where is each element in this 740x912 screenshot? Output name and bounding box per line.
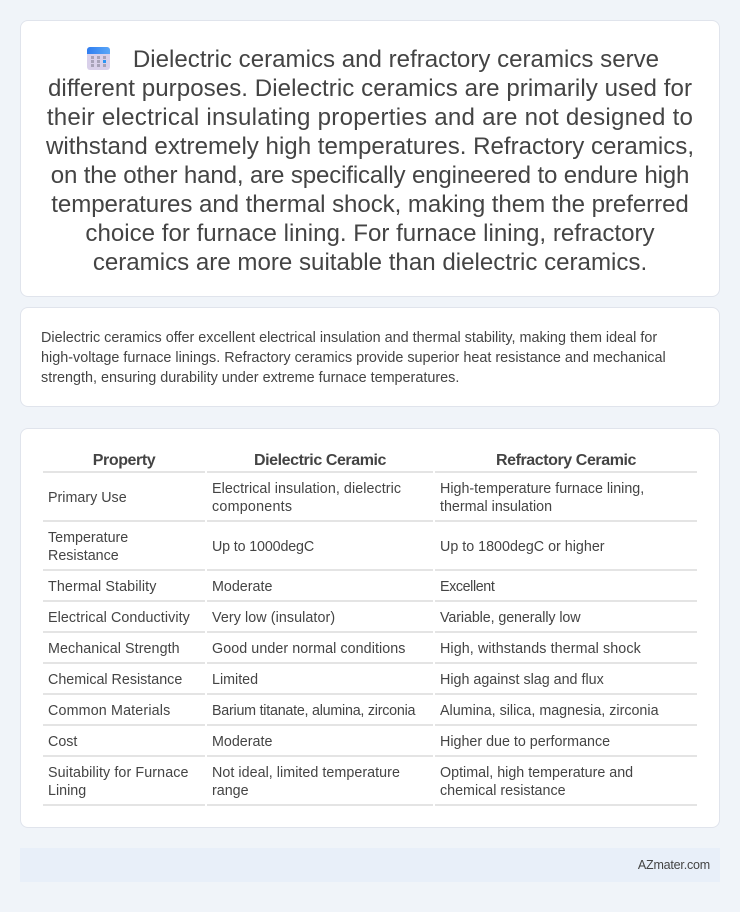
footer bar — [20, 848, 720, 882]
table header: Refractory Ceramic — [496, 452, 636, 469]
row: electrical conductivity: Electrical Conductivity — [48, 610, 190, 626]
comparison table: Moderate — [212, 579, 272, 595]
title: Dielectric ceramics and refractory ceramics serve — [133, 46, 659, 73]
icon: calendar — [87, 47, 110, 70]
comparison table: Not ideal, limited temperature — [212, 765, 400, 781]
comparison table: Limited — [212, 672, 258, 688]
row: temperature resistance — [48, 530, 128, 564]
comparison table: Excellent — [440, 579, 494, 595]
title: choice for furnace lining. For furnace lining, refractory — [85, 220, 655, 247]
row: mechanical strength: Mechanical Strength — [48, 641, 180, 657]
comparison table: Moderate — [212, 734, 272, 750]
table header — [93, 452, 636, 469]
row: temperature resistance: Temperature — [48, 530, 128, 546]
title — [46, 46, 694, 276]
table header: Dielectric Ceramic — [254, 452, 386, 469]
comparison table: Up to 1000degC — [212, 539, 314, 555]
title: their electrical insulating properties and are not designed to — [47, 104, 693, 131]
comparison table: Optimal, high temperature and — [440, 765, 633, 781]
comparison table: range — [212, 783, 249, 799]
title: different purposes. Dielectric ceramics are primarily used for — [48, 75, 692, 102]
comparison table: Variable, generally low — [440, 610, 580, 626]
comparison table: Up to 1800degC or higher — [440, 539, 605, 555]
panel: summary card — [20, 307, 720, 407]
row: suitability for furnace lining: Suitability for Furnace — [48, 765, 189, 781]
comparison table: Electrical insulation, dielectric — [212, 481, 401, 497]
summary text: strength, ensuring durability under extreme furnace temperatures. — [41, 370, 459, 386]
comparison table: Barium titanate, alumina, zirconia — [212, 703, 415, 719]
summary text — [41, 330, 666, 386]
row: chemical resistance: Chemical Resistance — [48, 672, 182, 688]
comparison table: chemical resistance — [440, 783, 566, 799]
panel: comparison table card — [20, 428, 720, 828]
summary text: high-voltage furnace linings. Refractory ceramics provide superior heat resistance and mechanical — [41, 350, 666, 366]
comparison table: Very low (insulator) — [212, 610, 335, 626]
row: temperature resistance: Resistance — [48, 548, 119, 564]
row: primary use: Primary Use — [48, 490, 127, 506]
row: thermal stability: Thermal Stability — [48, 579, 157, 595]
title: withstand extremely high temperatures. Refractory ceramics, — [46, 133, 694, 160]
comparison table: components — [212, 499, 292, 515]
title: on the other hand, are specifically engineered to endure high — [51, 162, 689, 189]
comparison table: High against slag and flux — [440, 672, 604, 688]
comparison table: Higher due to performance — [440, 734, 610, 750]
title: temperatures and thermal shock, making them the preferred — [51, 191, 689, 218]
comparison table: High, withstands thermal shock — [440, 641, 641, 657]
table header: Property — [93, 452, 155, 469]
title: ceramics are more suitable than dielectric ceramics. — [93, 249, 647, 276]
comparison table: Good under normal conditions — [212, 641, 406, 657]
comparison table: Alumina, silica, magnesia, zirconia — [440, 703, 659, 719]
comparison table: High-temperature furnace lining, — [440, 481, 644, 497]
comparison table: thermal insulation — [440, 499, 552, 515]
row: suitability for furnace lining — [48, 765, 189, 799]
row: cost: Cost — [48, 734, 77, 750]
row: common materials: Common Materials — [48, 703, 170, 719]
panel: title card — [20, 20, 720, 297]
footer brand: AZmater.com — [638, 858, 710, 872]
summary text: Dielectric ceramics offer excellent electrical insulation and thermal stability, making them ideal for — [41, 330, 657, 346]
row: suitability for furnace lining: Lining — [48, 783, 86, 799]
